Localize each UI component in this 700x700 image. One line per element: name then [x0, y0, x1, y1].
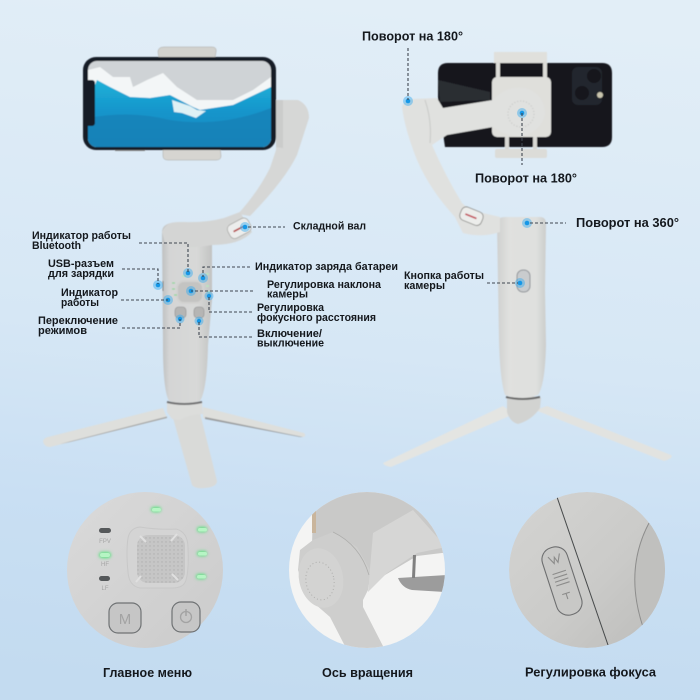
rotation housing	[298, 541, 383, 648]
top phone clamp	[158, 47, 216, 58]
status lights: FPV	[99, 539, 111, 545]
phone notch	[86, 80, 95, 126]
panel: focus control detail	[509, 492, 672, 648]
callout: camera tilt: камеры	[267, 288, 308, 300]
callout: bluetooth indicator: Индикатор работы	[32, 230, 131, 242]
callout: work indicator: работы	[61, 297, 99, 309]
camera button	[517, 270, 530, 292]
callout: mode switch	[38, 314, 184, 337]
rear handle ring	[506, 397, 540, 399]
focus slider	[541, 546, 583, 616]
caption: rotation axis: Ось вращения	[322, 665, 413, 680]
callout: camera button: камеры	[404, 280, 445, 292]
callout: clamp rotation 180: Поворот на 180°	[475, 170, 577, 186]
callout: battery indicator: Индикатор заряда батареи	[255, 261, 398, 273]
phone front	[83, 57, 276, 151]
folding arm front	[238, 100, 309, 216]
platform	[398, 575, 446, 592]
callout: power: выключение	[257, 338, 324, 350]
joystick	[127, 527, 188, 588]
callout: camera tilt	[186, 279, 382, 300]
callout: camera tilt: Регулировка наклона	[267, 279, 382, 291]
M button	[109, 603, 141, 633]
callout: rotation 360: Поворот на 360°	[576, 215, 679, 230]
callout: bluetooth indicator: Bluetooth	[32, 240, 81, 252]
rear arm	[402, 88, 545, 235]
callout: bluetooth indicator	[32, 230, 193, 278]
callout: power: Включение/	[257, 328, 322, 340]
folding axis button	[226, 216, 253, 240]
rear handle	[497, 217, 546, 398]
back housing	[312, 492, 443, 584]
callout: focal length	[204, 292, 376, 324]
handle front	[162, 222, 212, 404]
rear tripod legs	[383, 406, 672, 467]
caption: main menu: Главное меню	[103, 665, 192, 680]
rear pivot ring	[508, 101, 534, 127]
rear arm joint shade	[425, 100, 430, 143]
control buttons front	[163, 274, 210, 318]
status lights: HF	[101, 562, 109, 568]
rear phone	[438, 63, 612, 147]
elbow joint	[162, 212, 252, 247]
rear elbow button	[458, 205, 485, 227]
knurled ring	[305, 562, 335, 600]
callout: power	[194, 316, 324, 350]
panel: rotation axis detail	[285, 490, 450, 650]
M button: M	[119, 611, 131, 628]
callout: camera button: Кнопка работы	[404, 270, 484, 282]
caption: focus adjustment: Регулировка фокуса	[525, 664, 657, 680]
callout: battery indicator	[198, 261, 398, 283]
callout: camera button	[404, 270, 525, 292]
callout: work indicator: Индикатор	[61, 287, 118, 299]
callout: mode switch: режимов	[38, 325, 87, 337]
callout: USB port: USB-разъем	[48, 258, 114, 270]
gimbal rear view	[383, 52, 672, 467]
callout: USB port: для зарядки	[48, 268, 114, 280]
status lights	[99, 507, 207, 592]
gold contacts	[312, 511, 316, 533]
tripod legs front	[43, 407, 305, 488]
callout: clamp rotation 180	[475, 108, 577, 186]
tripod base	[167, 401, 203, 420]
callout: focal length: Регулировка	[257, 302, 325, 314]
power button	[172, 602, 200, 632]
callout: mode switch: Переключение	[38, 315, 118, 327]
callout: USB port	[48, 258, 163, 290]
status lights: LF	[101, 586, 109, 592]
callout: folding shaft: Складной вал	[293, 220, 366, 232]
callout: top rotation 180	[362, 28, 463, 106]
callout: rotation 360	[522, 215, 679, 230]
gimbal front view	[43, 47, 309, 488]
bottom phone clamp	[163, 147, 221, 160]
rear tripod ball	[507, 396, 541, 424]
shaft	[368, 510, 446, 592]
callout: top rotation 180: Поворот на 180°	[362, 28, 463, 44]
callout: focal length: фокусного расстояния	[257, 312, 376, 324]
arm motor end	[276, 100, 283, 148]
rear phone clamp	[492, 52, 551, 158]
panel: main menu detail	[67, 492, 223, 648]
callout: folding shaft	[240, 220, 366, 232]
handle ring	[167, 402, 202, 404]
callout: work indicator	[61, 287, 173, 309]
